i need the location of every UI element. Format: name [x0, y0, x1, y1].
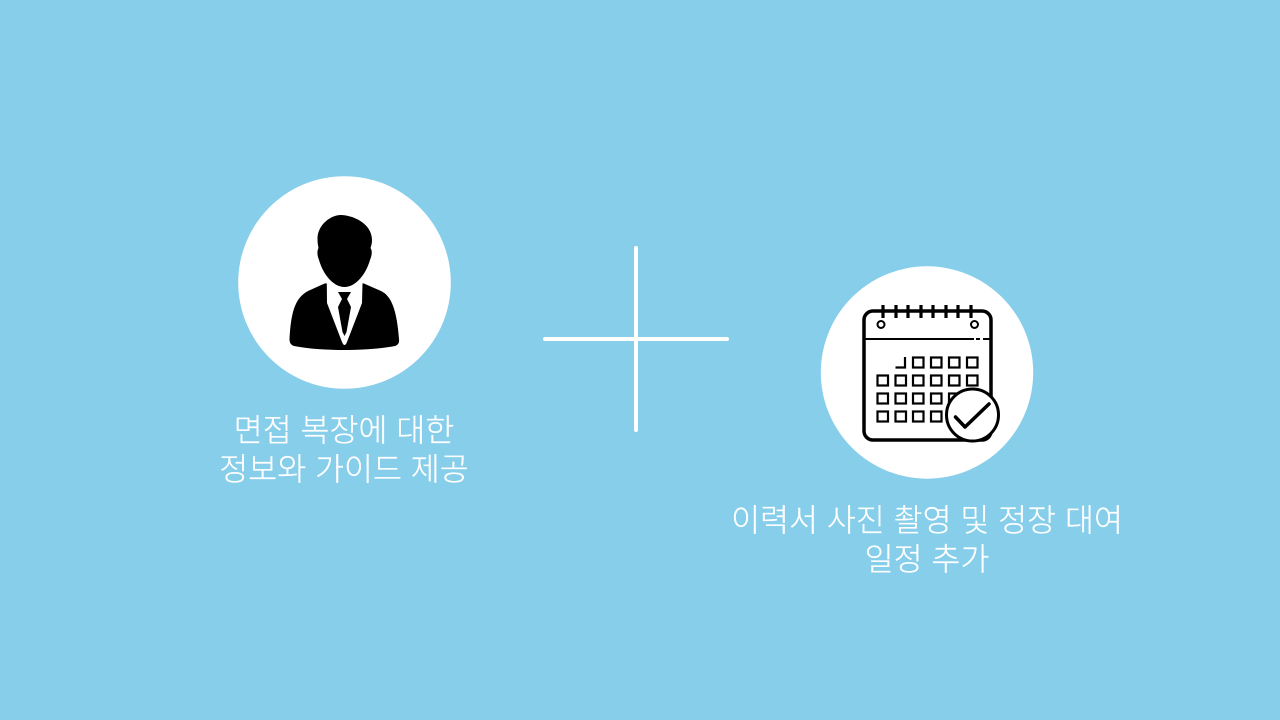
- icon: businessman in white circle: [238, 176, 451, 389]
- text block: left caption: [219, 404, 469, 490]
- text block: left caption: 면접 복장에 대한: [234, 404, 454, 450]
- text block: left caption: 정보와 가이드 제공: [219, 444, 469, 490]
- icon: calendar with check mark in white circle: [821, 266, 1033, 479]
- text block: right caption: 일정 추가: [865, 534, 989, 580]
- text block: right caption: [731, 494, 1123, 580]
- icon: plus sign: [545, 248, 727, 430]
- text block: right caption: 이력서 사진 촬영 및 정장 대여: [731, 494, 1123, 540]
